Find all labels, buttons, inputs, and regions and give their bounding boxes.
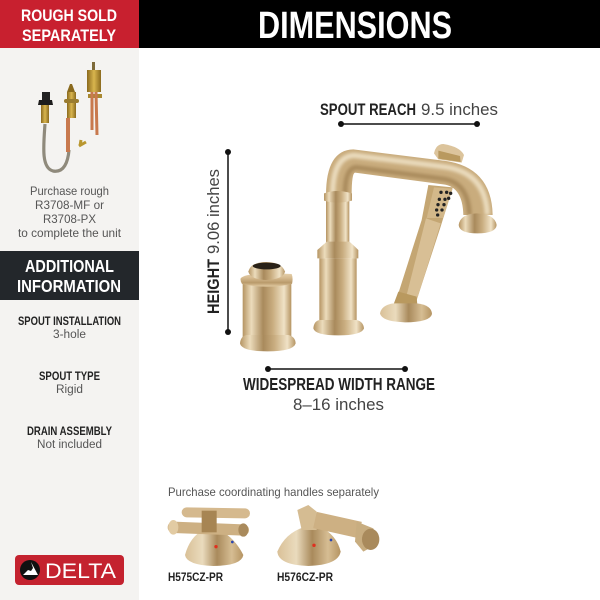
height dimension arrow [225,149,231,335]
spec: spout type [39,371,100,396]
spec: spout type: SPOUT TYPE [39,371,100,383]
handle model numbers: H575CZ-PR [168,572,224,584]
heading: additional information: INFORMATION [17,276,121,296]
spout reach label: 9.5 inches [421,101,498,119]
rough purchase note: Purchase rough [30,184,109,198]
delta logo: DELTA [45,560,116,583]
handle model numbers [168,572,334,584]
height label [204,169,223,314]
widespread width label: WIDESPREAD WIDTH RANGE [243,374,435,394]
faucet product image [240,144,497,351]
hand shower [380,144,464,322]
delta logo [15,555,124,585]
widespread width label [243,374,435,414]
widespread width label: 8–16 inches [293,396,384,414]
heading: additional information: ADDITIONAL [25,256,114,276]
rough valve product image [38,62,102,171]
height label: 9.06 inches [205,169,223,254]
diverter trim [240,262,296,351]
handle model numbers: H576CZ-PR [277,572,334,584]
spec: drain assembly: Not included [37,439,102,451]
spout reach label [320,100,498,119]
heading: additional information [0,251,139,300]
rough purchase note [18,184,122,240]
left sidebar panel [0,48,139,600]
main column [313,191,364,335]
handle H576CZ-PR [277,505,379,566]
coordinating handles note: Purchase coordinating handles separately [168,485,379,499]
spout reach label: SPOUT REACH [320,100,416,119]
spout reach dimension arrow [338,121,480,127]
title banner: dimensions: DIMENSIONS [258,5,452,47]
rough purchase note: to complete the unit [18,226,122,240]
spec: spout installation: 3-hole [53,329,86,341]
red banner: rough sold separately [0,0,139,48]
spec: spout type: Rigid [56,384,83,396]
height label: HEIGHT [204,258,223,314]
handle H575CZ-PR [168,511,248,566]
spec: drain assembly: DRAIN ASSEMBLY [27,426,112,438]
rough purchase note: R3708-PX [43,212,96,226]
spec: spout installation: SPOUT INSTALLATION [18,316,121,328]
spec: spout installation [18,316,121,341]
red banner: rough sold separately: SEPARATELY [22,26,117,45]
spout [326,149,497,233]
title banner: dimensions [139,0,600,48]
rough purchase note: R3708-MF or [35,198,104,212]
red banner: rough sold separately: ROUGH SOLD [21,6,117,25]
spec: drain assembly [27,426,112,451]
widespread width dimension arrow [265,366,408,372]
